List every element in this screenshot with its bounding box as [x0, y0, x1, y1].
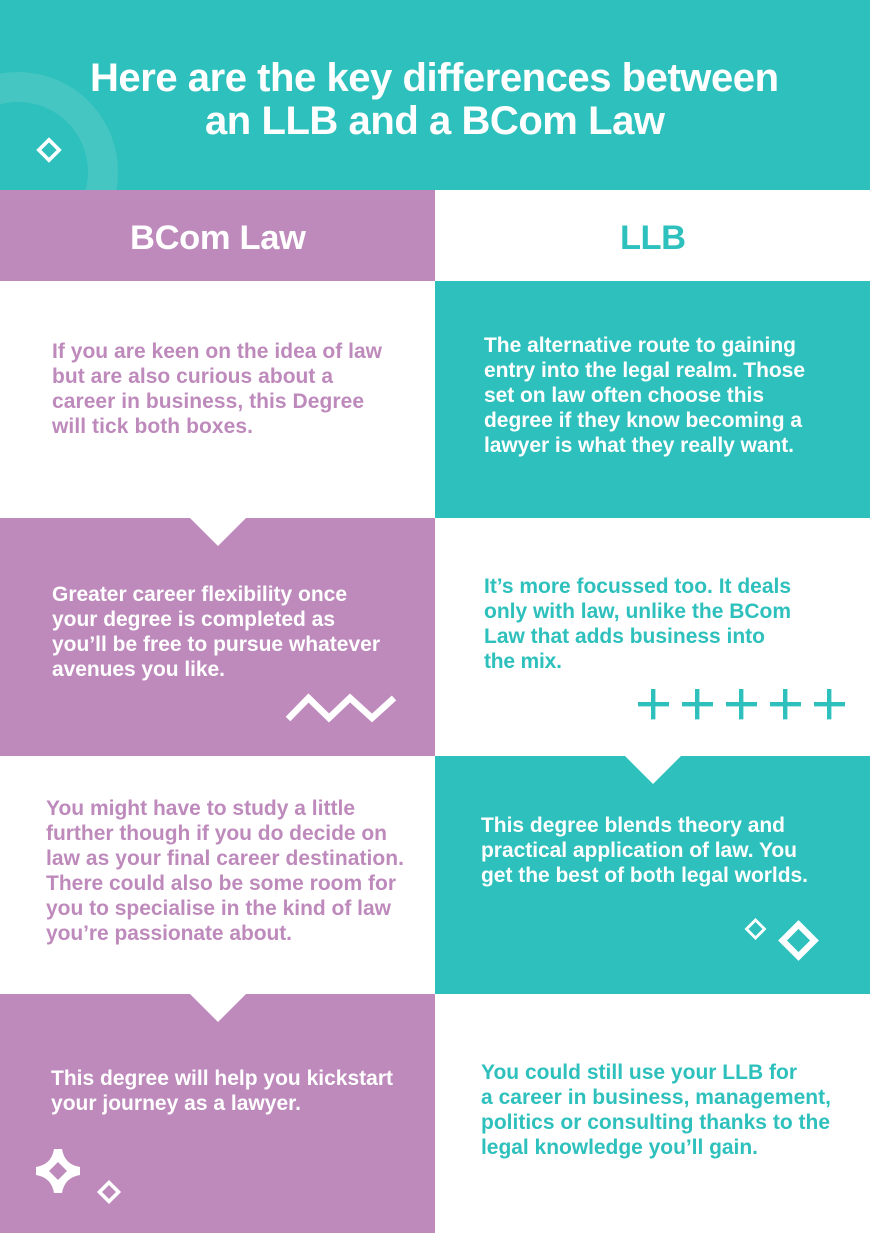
panel: BCom row 1 text: will tick both boxes. [51, 415, 253, 438]
panel: LLB row 4 text: a career in business, management, [481, 1086, 831, 1109]
panel: BCom row 2: you’ll be free to pursue whatever [52, 633, 380, 656]
panel: BCom row 2: Greater career flexibility once [52, 583, 347, 606]
icon: zigzag [288, 698, 394, 719]
panel: BCom row 2: your degree is completed as [52, 608, 335, 631]
panel: LLB row 2 text: It’s more focussed too. It deals [484, 575, 791, 598]
panel: BCom row 3 text: you’re passionate about. [46, 922, 292, 945]
panel: LLB row 1: set on law often choose this [484, 384, 764, 407]
panel: BCom row 3 text [46, 797, 404, 945]
panel: LLB row 1: degree if they know becoming a [484, 409, 802, 432]
title: an LLB and a BCom Law [205, 99, 666, 143]
icon: small diamond [746, 920, 764, 938]
panel: BCom Law heading [0, 190, 435, 281]
panel: BCom row 1 text: but are also curious about a [52, 365, 333, 388]
panel: LLB heading [435, 190, 870, 281]
panel: LLB row 1: entry into the legal realm. Those [484, 359, 805, 382]
panel: LLB row 4 text: You could still use your LLB for [481, 1061, 797, 1084]
panel: BCom row 3 text: further though if you do decide on [46, 822, 387, 845]
icon: header diamond [39, 140, 59, 160]
icon: large diamond [782, 924, 814, 956]
panel: LLB row 2 text: only with law, unlike the BCom [484, 600, 791, 623]
panel: LLB row 1: The alternative route to gaining [484, 334, 796, 357]
icon: four-point star [36, 1149, 80, 1193]
panel: BCom Law heading: BCom Law [130, 219, 306, 257]
panel: LLB row 3: get the best of both legal worlds. [481, 864, 808, 887]
panel: LLB row 1 [435, 281, 870, 518]
icon: row of plus signs [638, 689, 845, 719]
panel: LLB row 3: practical application of law. You [481, 839, 797, 862]
icon: bottom diamond [100, 1182, 118, 1202]
header banner [0, 0, 870, 190]
panel: BCom row 1 text: If you are keen on the idea of law [52, 340, 383, 363]
panel: BCom row 4 [0, 994, 435, 1233]
panel: BCom row 3 text: you to specialise in the kind of law [46, 897, 392, 920]
panel: BCom row 2 [0, 518, 435, 756]
panel: BCom row 4: your journey as a lawyer. [51, 1092, 301, 1115]
panel: LLB row 3: This degree blends theory and [481, 814, 785, 837]
panel: LLB row 2 text: Law that adds business into [484, 625, 765, 648]
panel: LLB row 3 [435, 756, 870, 994]
panel: LLB row 1: lawyer is what they really want. [484, 434, 794, 457]
panel: LLB row 2 text [484, 575, 791, 673]
panel: LLB row 4 text: legal knowledge you’ll gain. [481, 1136, 758, 1159]
panel: LLB heading: LLB [620, 219, 686, 257]
panel: BCom row 4: This degree will help you kickstart [51, 1067, 393, 1090]
panel: LLB row 4 text [481, 1061, 831, 1159]
panel: BCom row 3 text: law as your final career destination. [46, 847, 404, 870]
panel: LLB row 4 text: politics or consulting thanks to the [481, 1111, 830, 1134]
panel: BCom row 1 text: career in business, this Degree [52, 390, 364, 413]
panel: LLB row 2 text: the mix. [484, 650, 562, 673]
title [90, 56, 779, 143]
panel: BCom row 2: avenues you like. [52, 658, 225, 681]
panel: BCom row 3 text: There could also be some room for [46, 872, 396, 895]
panel: BCom row 3 text: You might have to study a little [46, 797, 355, 820]
panel: BCom row 1 text [51, 340, 383, 438]
title: Here are the key differences between [90, 56, 779, 100]
